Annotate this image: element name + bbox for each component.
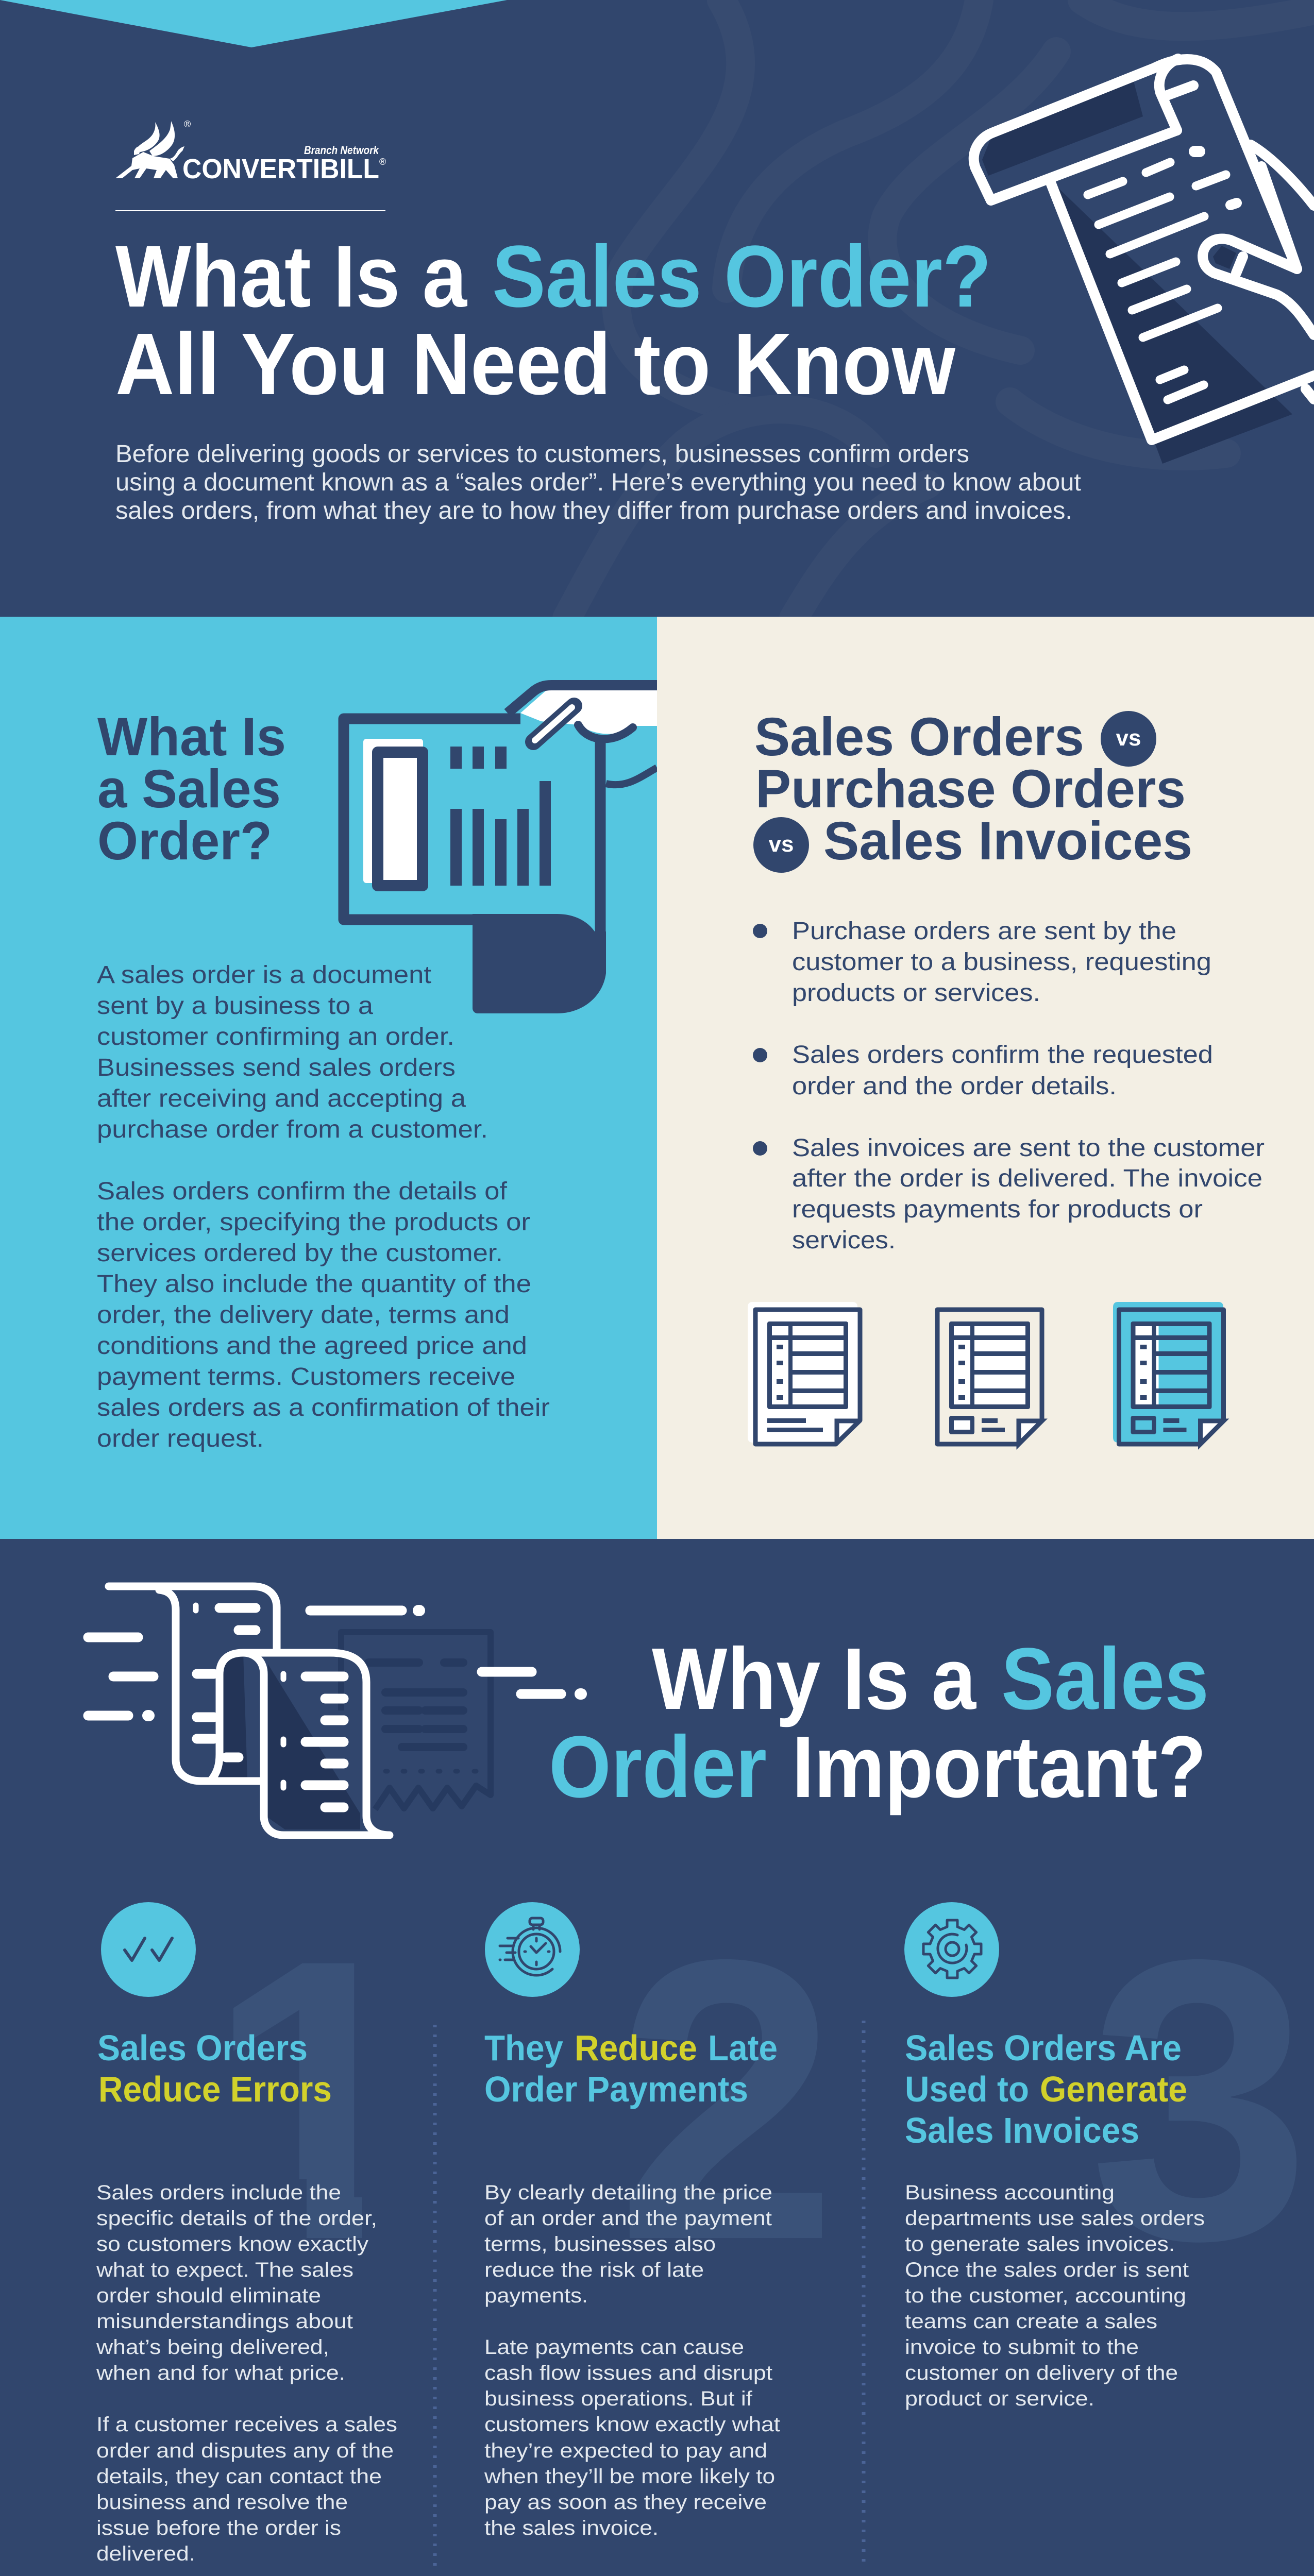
intro text: sales orders, from what they are to how they differ from purchase orders and invoices. [115,497,1072,524]
column 2: reduce late payments [484,1902,780,2539]
intro text [115,440,1081,524]
body: If a customer receives a sales [96,2413,397,2436]
heading [905,2028,1187,2150]
text: definition: after receiving and accepting a [97,1085,466,1112]
panel: why is a sales order important [83,1583,1296,2566]
hero background [0,0,1314,618]
body: specific details of the order, [96,2207,377,2230]
body [905,2181,1205,2410]
logo: Convertibill: ® [184,119,191,129]
title [115,228,991,413]
heading: why important: Important? [792,1718,1206,1816]
body: when they’ll be more likely to [484,2465,775,2488]
heading: Generate [1040,2069,1187,2109]
body: the sales invoice. [484,2517,659,2539]
body [96,2181,397,2565]
body: teams can create a sales [905,2310,1157,2333]
body: departments use sales orders [905,2207,1205,2230]
body: reduce the risk of late [484,2259,704,2281]
bullet list: requests payments for products or [792,1196,1203,1223]
text: definition: order, the delivery date, terms and [97,1301,510,1329]
text: definition: sent by a business to a [97,992,373,1020]
panel: sales orders vs purchase orders vs sales invoices [657,617,1314,1539]
heading: Late [708,2028,778,2068]
body: business operations. But if [484,2387,753,2410]
text: definition: the order, specifying the products or [97,1209,530,1236]
logo: Convertibill: Branch Network [304,144,380,157]
heading: comparison: Sales Invoices [823,811,1192,871]
icon: document 1 [748,1302,860,1444]
body: they’re expected to pay and [484,2439,767,2462]
panel: what is a sales order [0,617,657,1539]
body: business and resolve the [96,2491,348,2514]
body: of an order and the payment [484,2207,772,2230]
text: definition: payment terms. Customers receive [97,1363,515,1391]
bullet list: Purchase orders are sent by the [792,918,1176,945]
column 3: generate sales invoices [904,1902,1205,2410]
bullet list: order and the order details. [792,1073,1117,1100]
heading: comparison: Sales Orders [754,707,1084,767]
heading: Order Payments [484,2069,748,2109]
intro text: Before delivering goods or services to customers, businesses confirm orders [115,440,969,468]
heading: what is a sales order [97,707,286,871]
heading: what is a sales order: Order? [97,811,272,871]
icon: stopwatch [485,1902,580,1997]
heading: comparison: vs [769,832,794,857]
body: details, they can contact the [96,2465,382,2488]
heading: Sales Orders Are [905,2028,1182,2068]
text: definition: order request. [97,1425,264,1452]
logo: Convertibill: CONVERTIBILL [182,154,379,184]
body: delivered. [96,2543,195,2565]
watermark: bull swirl [567,0,1314,618]
bullet list: Sales orders confirm the requested [792,1041,1213,1069]
body: terms, businesses also [484,2233,716,2256]
icon: document 2 [937,1310,1042,1444]
heading: why important: Order [549,1718,767,1816]
body: Once the sales order is sent [905,2259,1189,2281]
text: definition: customer confirming an order. [97,1023,454,1050]
heading: Sales Orders [97,2028,308,2068]
body: to generate sales invoices. [905,2233,1175,2256]
title: All You Need to Know [115,315,956,413]
body: pay as soon as they receive [484,2491,767,2514]
text: definition: sales orders as a confirmation of their [97,1394,550,1421]
heading: comparison: vs [1116,725,1141,751]
body [484,2181,780,2539]
text: definition: Businesses send sales orders [97,1054,456,1081]
icon: receipt and hand [974,59,1314,464]
body: so customers know exactly [96,2233,368,2256]
body: to the customer, accounting [905,2284,1186,2307]
heading: what is a sales order: a Sales [97,759,281,819]
body: what’s being delivered, [96,2336,329,2359]
heading: They [484,2028,563,2068]
text: definition [97,961,550,1452]
intro text: using a document known as a “sales order”. Here’s everything you need to know about [115,469,1081,496]
body: product or service. [905,2387,1094,2410]
icon: receipts with speed lines [88,1586,581,1835]
body: Sales orders include the [96,2181,341,2204]
heading: Sales Invoices [905,2110,1139,2150]
ghost number 1: 1 [206,1877,428,2323]
icon: sales order document held by hand [344,685,657,1013]
body: misunderstandings about [96,2310,353,2333]
body: payments. [484,2284,588,2307]
text: definition: conditions and the agreed price and [97,1332,527,1360]
bullet list [753,918,1265,1254]
dotted dividers [99,2021,1230,2576]
heading: what is a sales order: What Is [97,707,286,767]
body: order should eliminate [96,2284,321,2307]
heading: Reduce Errors [98,2069,332,2109]
body: customers know exactly what [484,2413,780,2436]
ghost number 3: 3 [1089,1877,1311,2323]
title: Sales Order? [492,228,991,326]
body: what to expect. The sales [96,2259,353,2281]
text: definition: services ordered by the customer. [97,1240,503,1267]
heading: Used to [905,2069,1029,2109]
body: Late payments can cause [484,2336,744,2359]
body: Business accounting [905,2181,1115,2204]
text: definition: Sales orders confirm the details of [97,1178,508,1205]
icon: document 3 [1113,1302,1223,1444]
bullet list: customer to a business, requesting [792,948,1211,976]
body: issue before the order is [96,2517,341,2539]
bullet list: Sales invoices are sent to the customer [792,1134,1265,1162]
heading [97,2028,332,2109]
body: By clearly detailing the price [484,2181,772,2204]
body: customer on delivery of the [905,2362,1178,2384]
body: invoice to submit to the [905,2336,1139,2359]
body: order and disputes any of the [96,2439,394,2462]
heading [484,2028,778,2109]
logo: Convertibill [115,119,386,184]
ghost number 2: 2 [616,1877,838,2323]
heading: why important: Why Is a [652,1630,976,1728]
heading: comparison: Purchase Orders [755,759,1186,819]
bullet list: products or services. [792,979,1040,1007]
body: when and for what price. [96,2362,345,2384]
bullet list: after the order is delivered. The invoice [792,1165,1262,1192]
heading: comparison [753,707,1192,873]
chevron [0,0,507,47]
column 1: reduce errors [96,1902,397,2565]
text: definition: purchase order from a customer. [97,1116,488,1143]
heading: why important: Sales [1001,1630,1209,1728]
body: cash flow issues and disrupt [484,2362,772,2384]
logo: Convertibill: ® [379,157,386,167]
heading: Reduce [575,2028,697,2068]
bullet list: services. [792,1227,896,1254]
heading: why important [549,1630,1209,1816]
icon: double check [101,1902,196,1997]
text: definition: A sales order is a document [97,961,431,989]
title: What Is a [115,228,467,326]
text: definition: They also include the quantity of the [97,1270,531,1298]
icon: gear [904,1902,999,1997]
